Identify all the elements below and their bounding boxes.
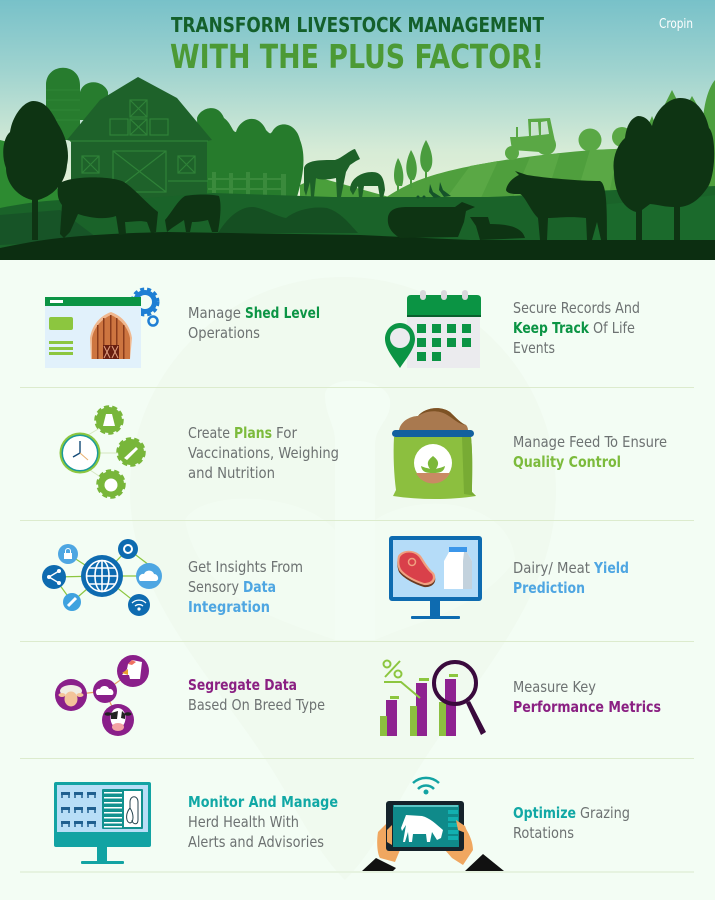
- cow lying: [388, 202, 475, 238]
- standing cow right: [506, 171, 607, 240]
- text: measure key: Measure Key: [513, 678, 596, 696]
- dividers: [20, 388, 694, 872]
- wifi: [413, 778, 439, 789]
- icon: barn dashboard: [45, 289, 158, 368]
- text: segregate data: Based On Breed Type: [188, 696, 325, 714]
- text: segregate data: Segregate Data: [188, 676, 297, 694]
- icon: monitor with meat and milk: [391, 538, 480, 619]
- sky: [0, 0, 715, 200]
- trees behind barn: [197, 108, 303, 200]
- text: measure key: [513, 678, 661, 716]
- text: segregate data: [188, 676, 325, 714]
- watermark: location pin: [130, 277, 556, 880]
- icon: bar chart with magnifier: [380, 660, 486, 736]
- percent sign: [384, 660, 402, 678]
- mid ground: [0, 186, 715, 250]
- text: optimize grazing: Grazing: [580, 804, 630, 822]
- title line 2: WITH THE PLUS FACTOR!: [170, 37, 544, 76]
- left hills: [0, 140, 70, 215]
- text: get insights: Sensory: [188, 578, 239, 596]
- text: create plans: Plans: [234, 424, 272, 442]
- shrubs: [218, 207, 358, 233]
- icon: feed sack: [392, 408, 476, 499]
- barn: [67, 77, 212, 200]
- right trees: [613, 98, 714, 240]
- geese: [416, 182, 451, 198]
- title line 1: TRANSFORM LIVESTOCK MANAGEMENT: [171, 13, 544, 37]
- text: manage shed level: [188, 304, 320, 342]
- icon: tablet with cow: [362, 778, 504, 871]
- left tree: [3, 101, 68, 240]
- text: create plans: and Nutrition: [188, 464, 275, 482]
- text: secure records: Events: [513, 339, 555, 357]
- icon: clock and gears: [60, 407, 144, 497]
- text: manage shed level: Manage: [188, 304, 241, 322]
- text: monitor and manage: Alerts and Advisories: [188, 833, 324, 851]
- far right trees: [642, 80, 715, 160]
- text: dairy meat: Dairy/ Meat: [513, 559, 591, 577]
- text: dairy meat: Prediction: [513, 579, 585, 597]
- cow grazing: [58, 177, 158, 238]
- text: measure key: Performance Metrics: [513, 698, 661, 716]
- text: get insights: Integration: [188, 598, 270, 616]
- calf lying: [470, 217, 525, 240]
- text: manage feed: Manage Feed To Ensure: [513, 433, 667, 451]
- text: dairy meat: [513, 559, 629, 597]
- foreground: [0, 232, 715, 260]
- text: create plans: Create: [188, 424, 230, 442]
- text: optimize grazing: Optimize: [513, 804, 576, 822]
- text: get insights: [188, 558, 303, 616]
- text: get insights: Data: [243, 578, 276, 596]
- header: farm landscape: [0, 0, 715, 260]
- icon: animal data circles: [55, 655, 149, 736]
- text: create plans: [188, 424, 339, 482]
- fence: [208, 172, 286, 196]
- text: secure records: [513, 299, 640, 357]
- text: get insights: Get Insights From: [188, 558, 303, 576]
- text: monitor and manage: [188, 793, 338, 851]
- text: secure records: Secure Records And: [513, 299, 640, 317]
- second horse: [350, 172, 385, 198]
- icon: herd health monitor: [54, 782, 151, 864]
- silos: [46, 68, 108, 140]
- text: dairy meat: Yield: [593, 559, 629, 577]
- text: create plans: Vaccinations, Weighing: [188, 444, 339, 462]
- text: manage shed level: Shed Level: [245, 304, 320, 322]
- rolling light hill: [385, 140, 715, 210]
- text: manage feed: Quality Control: [513, 453, 621, 471]
- logo: Cropin: Cropin: [659, 16, 693, 32]
- title: [170, 13, 544, 76]
- cypress trees: [394, 140, 432, 192]
- text: manage shed level: Operations: [188, 324, 260, 342]
- text: monitor and manage: Monitor And Manage: [188, 793, 338, 811]
- text: optimize grazing: [513, 804, 630, 842]
- horse: [304, 149, 360, 197]
- text: optimize grazing: Rotations: [513, 824, 574, 842]
- tractor: [505, 118, 556, 160]
- text: create plans: For: [276, 424, 297, 442]
- icon: calendar with pin: [385, 290, 481, 368]
- text: manage feed: [513, 433, 667, 471]
- icon: network: [42, 539, 162, 616]
- text: secure records: Keep Track: [513, 319, 590, 337]
- hay bales: [578, 127, 632, 152]
- text: monitor and manage: Herd Health With: [188, 813, 299, 831]
- calf grazing: [165, 194, 221, 232]
- text: secure records: Of Life: [593, 319, 635, 337]
